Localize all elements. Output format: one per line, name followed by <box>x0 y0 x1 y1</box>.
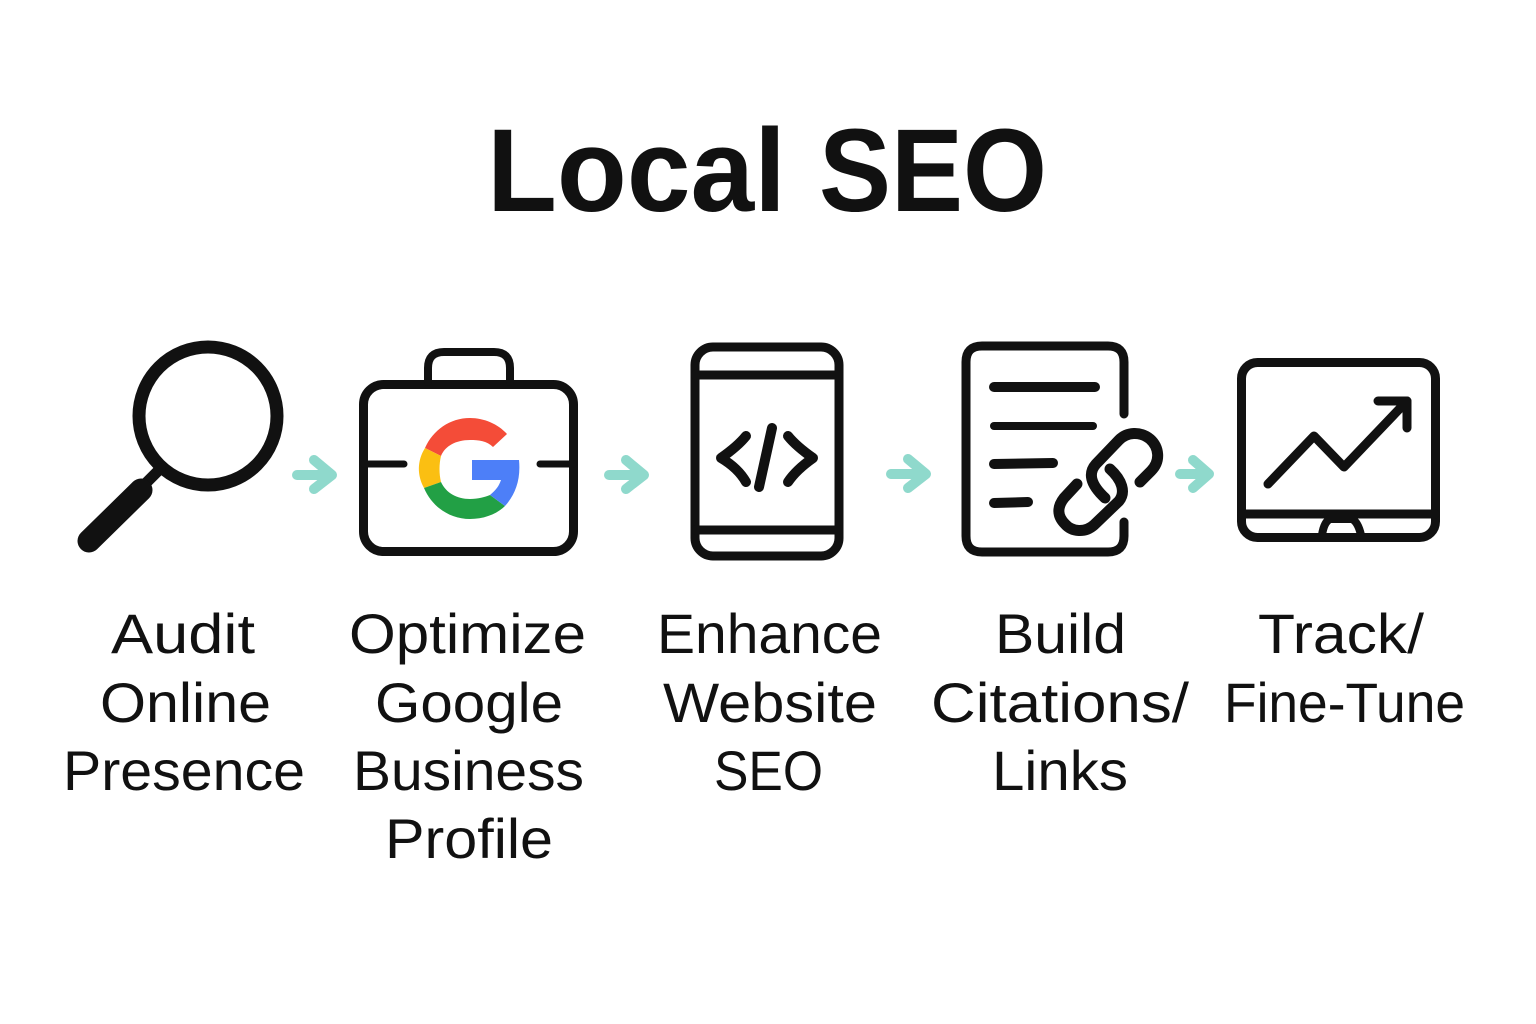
label: Build Citations/ Links: Citations/ <box>931 671 1189 734</box>
label: Audit Online Presence: Presence <box>63 739 305 802</box>
icon: phone with code symbol <box>695 347 839 556</box>
label: Optimize Google Business Profile: Profile <box>385 807 553 870</box>
label: Track/ Fine-Tune: Fine-Tune <box>1224 671 1465 734</box>
arrow: step 4 to step 5 <box>1180 460 1209 488</box>
title: Local <box>487 105 786 237</box>
icon: magnifying glass <box>89 347 277 541</box>
label: Optimize Google Business Profile <box>349 602 586 870</box>
label: Enhance Website SEO: Website <box>663 671 877 734</box>
label: Audit Online Presence <box>63 602 305 802</box>
icon: briefcase with Google logo <box>364 352 574 552</box>
arrow: step 3 to step 4 <box>891 459 926 488</box>
label: Enhance Website SEO: Enhance <box>657 602 882 665</box>
label: Audit Online Presence: Audit <box>111 602 255 665</box>
title: SEO <box>819 105 1047 237</box>
arrow: step 2 to step 3 <box>609 460 644 489</box>
label: Track/ Fine-Tune: Track/ <box>1258 602 1424 665</box>
label: Optimize Google Business Profile: Google <box>375 671 563 734</box>
label: Build Citations/ Links: Build <box>995 602 1126 665</box>
label: Optimize Google Business Profile: Optimize <box>349 602 586 665</box>
label: Enhance Website SEO: SEO <box>714 739 823 802</box>
icon: document with chain link <box>966 346 1158 552</box>
label: Build Citations/ Links: Links <box>992 739 1128 802</box>
label: Enhance Website SEO <box>657 602 882 802</box>
title <box>487 105 1047 237</box>
label: Build Citations/ Links <box>931 602 1189 802</box>
label: Audit Online Presence: Online <box>100 671 271 734</box>
arrow: step 1 to step 2 <box>297 460 332 489</box>
label: Optimize Google Business Profile: Business <box>353 739 584 802</box>
label: Track/ Fine-Tune <box>1224 602 1465 734</box>
icon: monitor with rising chart <box>1242 362 1436 538</box>
